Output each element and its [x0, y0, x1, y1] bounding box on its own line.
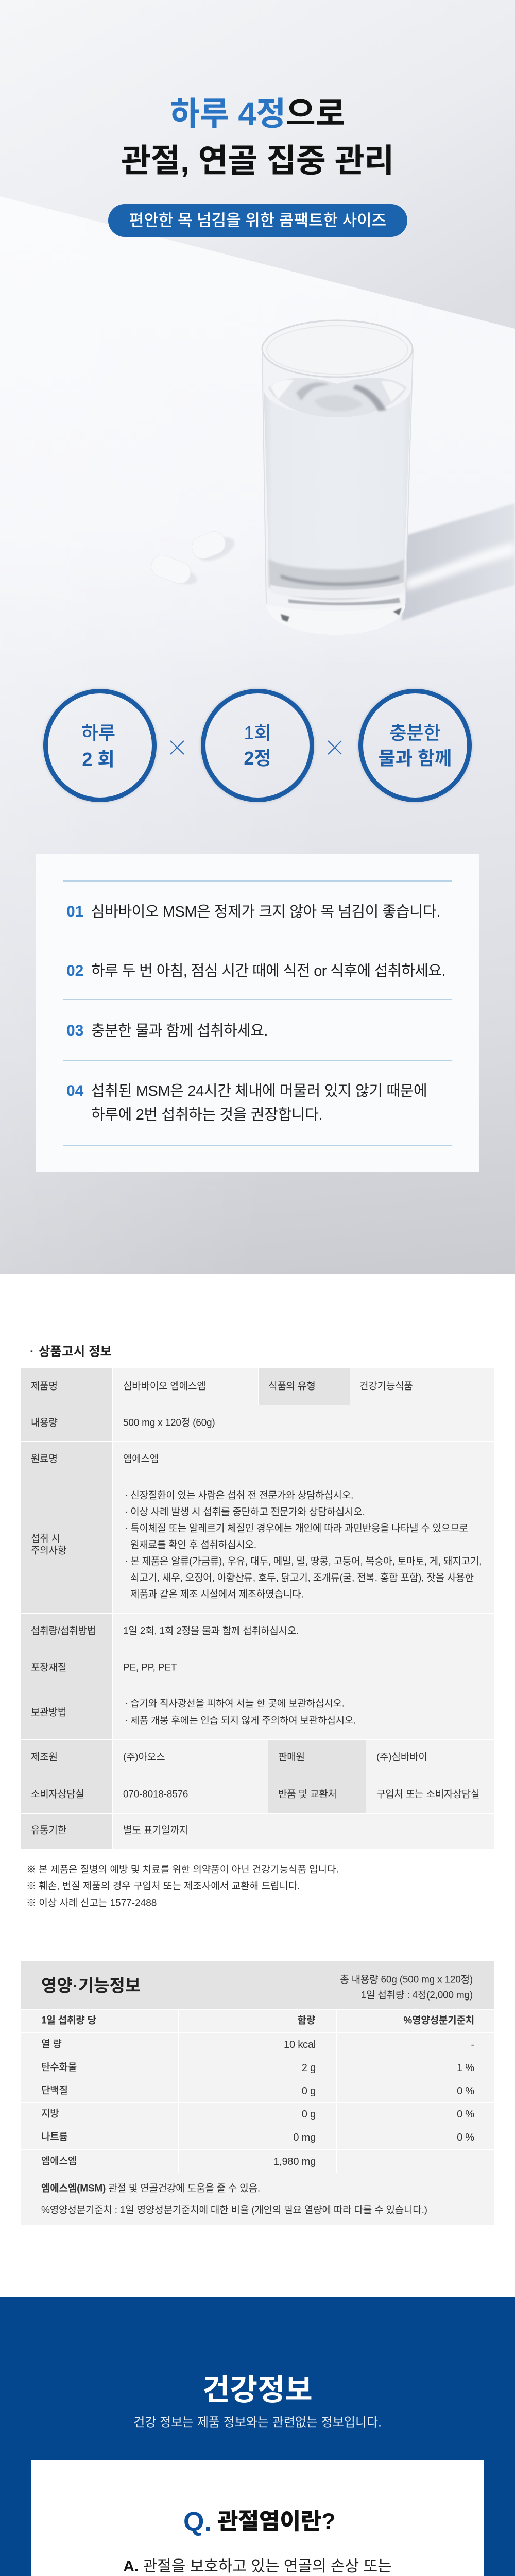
row: customer center and returns: 반품 및 교환처 — [278, 1789, 337, 1800]
row: precautions: · 신장질환이 있는 사람은 섭취 전 전문가와 상담하십시오. — [125, 1490, 353, 1501]
dosage circle: 2 times a day: 2 회 — [82, 749, 115, 770]
nutrition column headers: %영양성분기준치 — [403, 2015, 474, 2026]
section heading: 건강정보 — [202, 2374, 313, 2407]
dosage circle: 2 tablets each: 1회 — [244, 722, 271, 743]
dosage circle: with plenty of water: 물과 함께 — [379, 748, 452, 769]
row: product name: 심바바이오 엠에스엠 — [123, 1381, 206, 1392]
dosage circle: with plenty of water: 충분한 — [389, 722, 441, 743]
dosage circle: 2 tablets each — [201, 689, 314, 802]
row: storage: 보관방법 — [31, 1707, 66, 1718]
row: intake method: 1일 2회, 1회 2정을 물과 함께 섭취하십시오. — [123, 1625, 299, 1636]
row: storage — [31, 1698, 356, 1726]
item 01: 심바바이오 MSM은 정제가 크지 않아 목 넘김이 좋습니다. — [91, 904, 440, 920]
item 04: 섭취된 MSM은 24시간 체내에 머물러 있지 않기 때문에 — [91, 1083, 427, 1099]
row: ingredients: 원료명 — [31, 1453, 58, 1464]
row: manufacturer and seller: 판매원 — [278, 1752, 305, 1762]
nutrition row: fat: 0 % — [457, 2109, 474, 2120]
table: product notice — [21, 1368, 494, 1849]
row: precautions: · 본 제품은 알류(가금류), 우유, 대두, 메밀, 밀, 땅콩, 고등어, 복숭아, 토마토, 게, 돼지고기, — [125, 1556, 482, 1567]
heading: product notice: · — [30, 1345, 34, 1359]
tablets — [148, 528, 238, 588]
nutrition row: sodium: 0 mg — [293, 2132, 316, 2143]
nutrition row: protein: 0 g — [302, 2086, 316, 2097]
nutrition header: 영양·기능정보 — [41, 1976, 141, 1995]
row: precautions: · 특이체질 또는 알레르기 체질인 경우에는 개인에 따라 과민반응을 나타낼 수 있으므로 — [125, 1523, 468, 1534]
row: product name: 건강기능식품 — [359, 1381, 413, 1392]
nutrition row: carbohydrate: 1 % — [457, 2062, 474, 2074]
panel: intake guide list — [36, 854, 479, 1172]
row: precautions: 섭취 시 — [31, 1533, 60, 1544]
icon: multiply sign — [170, 740, 184, 755]
item 04 — [66, 1082, 427, 1123]
row: manufacturer and seller: (주)아오스 — [123, 1752, 165, 1762]
title line 1: 하루 4정으로 — [170, 96, 345, 132]
glass — [262, 320, 413, 635]
row: customer center and returns: 소비자상담실 — [31, 1789, 84, 1800]
row: packaging — [31, 1662, 177, 1673]
notes below product table: ※ 이상 사례 신고는 1577-2488 — [26, 1897, 157, 1908]
nutrition column headers — [41, 2015, 474, 2026]
row: packaging: PE, PP, PET — [123, 1662, 177, 1673]
row: customer center and returns — [31, 1789, 479, 1800]
row: customer center and returns: 구입처 또는 소비자상담실 — [376, 1789, 479, 1800]
nutrition row: MSM — [41, 2156, 316, 2167]
wall — [0, 0, 515, 329]
row: ingredients: 엠에스엠 — [123, 1453, 159, 1464]
heading: product notice: 상품고시 정보 — [39, 1345, 112, 1359]
nutrition header — [21, 1961, 494, 2009]
question 1 — [183, 2507, 335, 2537]
nutrition row: carbohydrate — [41, 2062, 474, 2074]
dosage circle: 2 times a day — [43, 689, 157, 802]
item 02: 하루 두 번 아침, 점심 시간 때에 식전 or 식후에 섭취하세요. — [91, 963, 445, 979]
nutrition row: fat: 지방 — [41, 2108, 59, 2119]
item 03: 03 — [66, 1022, 83, 1039]
row: contents: 내용량 — [31, 1417, 58, 1428]
nutrition row: calories: 열 량 — [41, 2039, 62, 2049]
nutrition row: MSM: 1,980 mg — [273, 2156, 316, 2167]
nutrition row: sodium: 0 % — [457, 2132, 474, 2143]
nutrition row: calories — [41, 2039, 474, 2050]
row: precautions: · 이상 사례 발생 시 섭취를 중단하고 전문가와 상담하십시오. — [125, 1506, 365, 1517]
subtitle pill — [108, 204, 407, 237]
row: contents: 500 mg x 120정 (60g) — [123, 1417, 215, 1428]
panel: hero photo and dosage background — [0, 0, 515, 1274]
nutrition row: calories: 10 kcal — [284, 2039, 316, 2050]
nutrition row: carbohydrate: 2 g — [302, 2062, 316, 2074]
item 04: 하루에 2번 섭취하는 것을 권장합니다. — [91, 1107, 322, 1123]
row: manufacturer and seller: 제조원 — [31, 1752, 58, 1762]
row: expiry: 유통기한 — [31, 1825, 66, 1836]
answer 1: A. 관절을 보호하고 있는 연골의 손상 또는 — [123, 2558, 392, 2575]
notes below product table: ※ 본 제품은 질병의 예방 및 치료를 위한 의약품이 아닌 건강기능식품 입니다. — [26, 1864, 339, 1875]
item 01: 01 — [66, 903, 83, 920]
nutrition column headers: 함량 — [297, 2015, 315, 2026]
dosage circle: with plenty of water — [358, 689, 472, 802]
table: nutrition and function information — [21, 1961, 494, 2225]
row: precautions: 주의사항 — [31, 1545, 66, 1556]
nutrition row: protein — [41, 2085, 474, 2097]
dosage circle: 2 tablets each: 2정 — [244, 748, 271, 769]
nutrition header: 1일 섭취량 : 4정(2,000 mg) — [361, 1990, 473, 2001]
row: intake method — [31, 1625, 299, 1636]
icon: multiply sign — [328, 740, 342, 755]
nutrition footnotes: %영양성분기준치 : 1일 영양성분기준치에 대한 비율 (개인의 필요 열량에 따라 다를 수 있습니다.) — [41, 2205, 427, 2215]
item 03: 충분한 물과 함께 섭취하세요. — [91, 1023, 268, 1039]
row: precautions: 원재료를 확인 후 섭취하십시오. — [130, 1539, 256, 1550]
question 1: Q. — [183, 2507, 212, 2537]
row: precautions — [31, 1490, 482, 1600]
section subtitle: 건강 정보는 제품 정보와는 관련없는 정보입니다. — [133, 2416, 382, 2430]
table surface — [0, 196, 515, 670]
row: precautions: 제품과 같은 제조 시설에서 제조하였습니다. — [130, 1589, 303, 1600]
nutrition header: 총 내용량 60g (500 mg x 120정) — [340, 1974, 473, 1985]
nutrition column headers: 1일 섭취량 당 — [41, 2015, 96, 2026]
nutrition row: protein: 0 % — [457, 2086, 474, 2097]
title line 2: 관절, 연골 집중 관리 — [121, 143, 394, 179]
row: packaging: 포장재질 — [31, 1662, 66, 1673]
row: intake method: 섭취량/섭취방법 — [31, 1625, 96, 1636]
row: product name: 식품의 유형 — [268, 1381, 315, 1392]
nutrition row: fat: 0 g — [302, 2109, 316, 2120]
row: storage: · 제품 개봉 후에는 인습 되지 않게 주의하여 보관하십시오. — [125, 1715, 356, 1726]
item 04: 04 — [66, 1082, 83, 1099]
nutrition footnotes: 엠에스엠(MSM) 관절 및 연골건강에 도움을 줄 수 있음. — [41, 2183, 260, 2194]
nutrition row: protein: 단백질 — [41, 2085, 68, 2096]
notes below product table — [26, 1864, 339, 1908]
nutrition row: sodium: 나트륨 — [41, 2131, 68, 2142]
row: expiry: 별도 표기일까지 — [123, 1825, 188, 1836]
row: expiry — [31, 1825, 188, 1836]
nutrition row: calories: - — [471, 2039, 474, 2050]
photo: glass of water and tablets on white table — [164, 95, 515, 635]
panel: health information section — [0, 2297, 515, 2576]
notes below product table: ※ 훼손, 변질 제품의 경우 구입처 또는 제조사에서 교환해 드립니다. — [26, 1880, 300, 1891]
subtitle pill: 편안한 목 넘김을 위한 콤팩트한 사이즈 — [129, 212, 386, 230]
row: manufacturer and seller: (주)심바바이 — [376, 1752, 427, 1762]
nutrition row: carbohydrate: 탄수화물 — [41, 2062, 77, 2073]
row: product name: 제품명 — [31, 1381, 58, 1392]
row: precautions: 쇠고기, 새우, 오징어, 아황산류, 호두, 닭고기, 조개류(굴, 전복, 홍합 포함), 잣을 사용한 — [130, 1572, 474, 1583]
nutrition row: MSM: 엠에스엠 — [41, 2156, 77, 2166]
question 1: 관절염이란? — [217, 2509, 335, 2534]
title — [121, 96, 394, 179]
row: manufacturer and seller — [31, 1752, 427, 1762]
glass shadow — [402, 503, 515, 621]
nutrition footnotes — [41, 2183, 427, 2215]
row: customer center and returns: 070-8018-8576 — [123, 1789, 188, 1800]
item 02: 02 — [66, 962, 83, 979]
nutrition row: fat — [41, 2108, 474, 2120]
row: storage: · 습기와 직사광선을 피하여 서늘 한 곳에 보관하십시오. — [125, 1698, 345, 1709]
card: Q and A — [31, 2460, 484, 2576]
row: ingredients — [31, 1453, 159, 1464]
nutrition row: sodium — [41, 2131, 474, 2143]
dosage circle: 2 times a day: 하루 — [81, 722, 115, 743]
row: contents — [31, 1417, 215, 1428]
row: product name — [31, 1381, 413, 1392]
